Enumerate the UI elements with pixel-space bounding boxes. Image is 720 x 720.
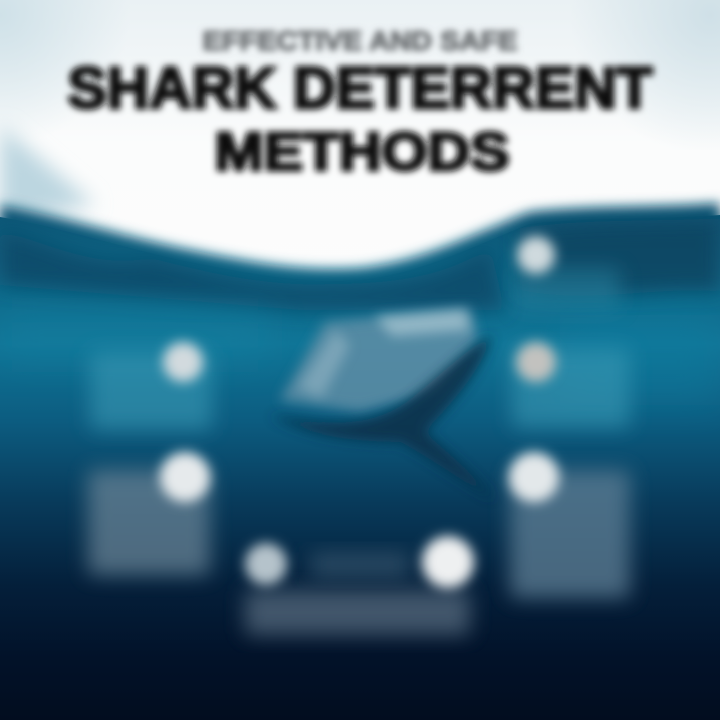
title: second line: METHODS (214, 122, 510, 182)
card: bottom center (245, 536, 474, 635)
card: lower right (509, 452, 630, 598)
icon: lower right (509, 452, 559, 502)
icon: middle right (516, 342, 556, 382)
icon: lower left (160, 452, 210, 502)
water body (0, 203, 720, 720)
icon: bottom right (422, 536, 474, 588)
shark illustration (270, 308, 495, 500)
card: top right (515, 236, 620, 310)
card: lower left (88, 452, 210, 575)
title: main line: SHARK DETERRENT (68, 56, 652, 121)
icon: top right (517, 236, 555, 274)
card: middle right (512, 342, 630, 428)
title (68, 26, 652, 182)
icon: bottom left (245, 543, 287, 585)
icon: middle left (163, 342, 203, 382)
card: middle left (90, 342, 212, 430)
title: top line: EFFECTIVE AND SAFE (202, 26, 518, 56)
